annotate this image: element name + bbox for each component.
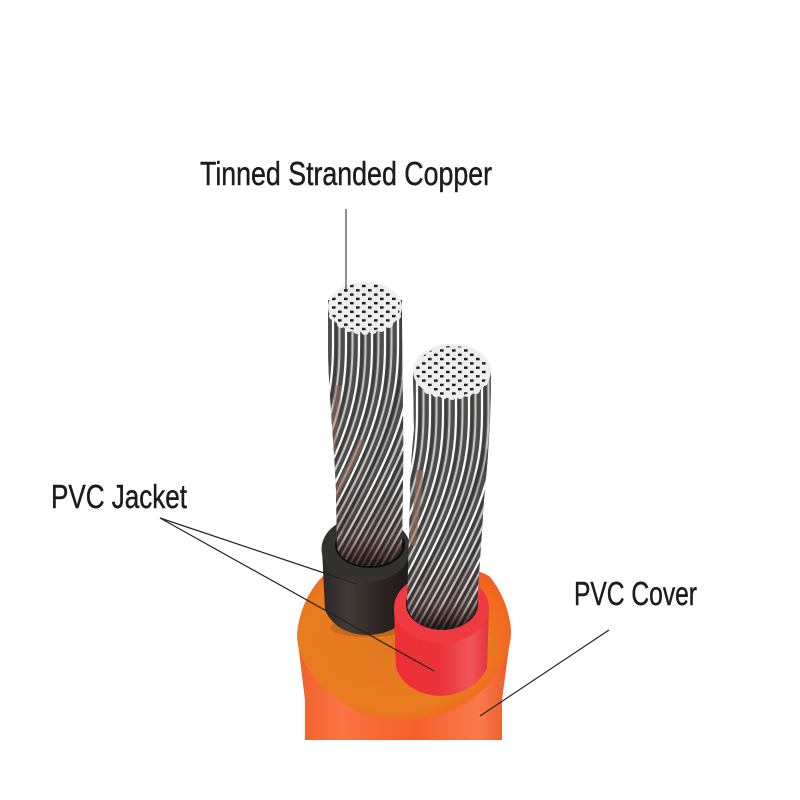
label: Tinned Stranded Copper: Tinned Stranded Copper <box>200 155 492 192</box>
panel: red PVC jacket <box>394 573 489 696</box>
leader lines: PVC jacket <box>160 518 434 671</box>
leader line: PVC cover <box>480 630 609 716</box>
left stranded copper conductor <box>328 282 404 566</box>
right stranded copper conductor <box>407 344 491 630</box>
label: PVC Cover: PVC Cover <box>574 575 697 612</box>
leader line: copper <box>345 209 347 292</box>
panel: PVC cover <box>297 564 511 740</box>
label: PVC Jacket: PVC Jacket <box>51 478 187 515</box>
panel: black PVC jacket <box>322 516 411 635</box>
cable diagram <box>52 160 697 740</box>
